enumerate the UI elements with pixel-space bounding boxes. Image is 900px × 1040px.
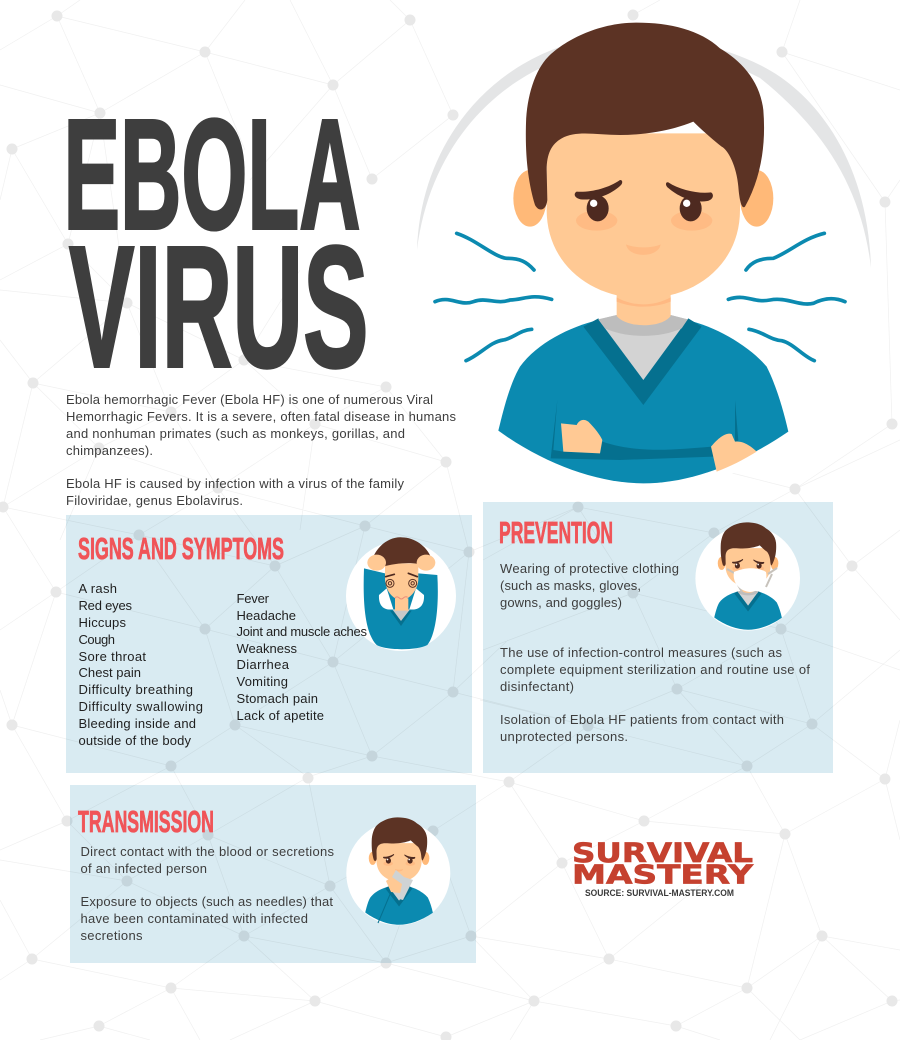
symptom list: column one: Difficulty swallowing	[78, 699, 203, 714]
symptom list: column one: Red eyes	[78, 598, 132, 613]
symptom list: column one: Chest pain	[78, 665, 141, 680]
heading: transmission: TRANSMISSION	[78, 804, 214, 839]
intro text: Ebola HF is caused by infection with a virus of the family	[66, 476, 404, 491]
prevention text: disinfectant)	[500, 679, 574, 694]
heading: signs and symptoms: SIGNS AND SYMPTOMS	[78, 531, 284, 566]
panel: transmission	[70, 785, 476, 963]
intro text: Hemorrhagic Fevers. It is a severe, often fatal disease in humans	[66, 409, 456, 424]
symptom list: column two: Weakness	[236, 641, 298, 656]
shiver lines	[435, 233, 845, 361]
crossed arms and hands	[551, 400, 757, 472]
symptom list: column one: A rash	[78, 581, 117, 596]
heading: prevention: PREVENTION	[499, 515, 613, 550]
title	[64, 88, 369, 404]
symptom list: column two: Stomach pain	[236, 691, 318, 706]
symptom list: column two: Joint and muscle aches	[236, 624, 368, 639]
grey arc behind head	[417, 36, 871, 268]
symptom list: column one: Difficulty breathing	[78, 682, 193, 697]
transmission text: Exposure to objects (such as needles) that	[80, 894, 333, 909]
symptom list: column two	[236, 591, 368, 723]
symptom list: column two: Lack of apetite	[236, 708, 324, 723]
source line: SOURCE: SURVIVAL-MASTERY.COM	[585, 888, 734, 899]
symptom list: column one: outside of the body	[78, 733, 192, 748]
symptom list: column one: Cough	[78, 632, 115, 647]
prevention text: Wearing of protective clothing	[500, 561, 679, 576]
symptom list: column two: Vomiting	[236, 674, 288, 689]
logo: survival mastery	[572, 838, 755, 899]
intro text	[66, 392, 456, 508]
icon: man holding his head	[346, 537, 456, 651]
prevention text: (such as masks, gloves,	[500, 578, 641, 593]
transmission text: secretions	[80, 928, 143, 943]
symptom list: column one: Sore throat	[78, 649, 146, 664]
icon: man wearing mask	[695, 522, 800, 631]
symptom list: column one	[78, 581, 203, 748]
intro text: and nonhuman primates (such as monkeys, gorillas, and	[66, 426, 405, 441]
title: EBOLA	[64, 88, 360, 262]
illustration: sick man	[435, 23, 845, 483]
symptom list: column two: Headache	[236, 608, 296, 623]
panel: signs and symptoms	[66, 515, 472, 773]
transmission text: have been contaminated with infected	[80, 911, 308, 926]
icon: man with hand at mouth	[346, 817, 450, 925]
transmission text	[80, 844, 334, 943]
prevention text: gowns, and goggles)	[500, 595, 622, 610]
symptom list: column two: Fever	[236, 591, 270, 606]
intro text: chimpanzees).	[66, 443, 153, 458]
prevention text: Isolation of Ebola HF patients from contact with	[500, 712, 784, 727]
symptom list: column one: Bleeding inside and	[78, 716, 196, 731]
prevention text: complete equipment sterilization and routine use of	[500, 662, 810, 677]
logo: survival mastery: SURVIVAL	[572, 838, 753, 869]
intro text: Ebola hemorrhagic Fever (Ebola HF) is one of numerous Viral	[66, 392, 433, 407]
transmission text: of an infected person	[80, 861, 207, 876]
symptom list: column one: Hiccups	[78, 615, 126, 630]
panel: prevention	[483, 502, 833, 773]
white halo behind figure	[419, 39, 871, 491]
transmission text: Direct contact with the blood or secretions	[80, 844, 334, 859]
title: VIRUS	[69, 210, 369, 404]
logo: survival mastery: MASTERY	[572, 860, 755, 890]
prevention text: The use of infection-control measures (such as	[500, 645, 782, 660]
symptom list: column two: Diarrhea	[236, 657, 290, 672]
prevention text	[500, 561, 810, 744]
intro text: Filoviridae, genus Ebolavirus.	[66, 493, 243, 508]
prevention text: unprotected persons.	[500, 729, 628, 744]
